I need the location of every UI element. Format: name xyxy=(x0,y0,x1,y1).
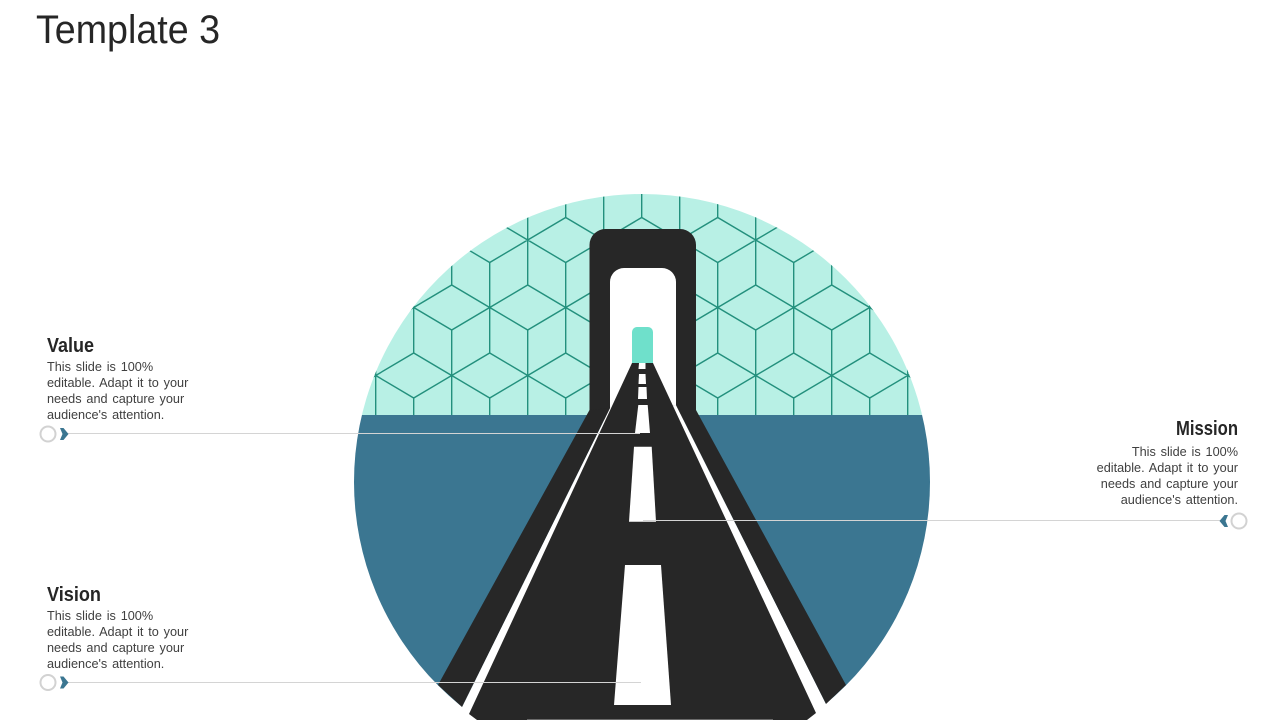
connector line: mission xyxy=(643,520,1222,522)
text block: mission: editable. Adapt it to your xyxy=(1097,461,1239,475)
connector line: value xyxy=(68,432,640,434)
marker circle: value xyxy=(40,426,56,442)
callout: value xyxy=(40,335,640,442)
heading: vision: Vision xyxy=(47,584,101,606)
van in tunnel xyxy=(632,327,653,363)
text block: vision: This slide is 100% xyxy=(47,609,153,623)
road white base xyxy=(462,405,826,720)
text block: vision: audience's attention. xyxy=(47,657,164,671)
text block: mission: This slide is 100% xyxy=(1132,445,1238,459)
chevron: value xyxy=(60,428,68,440)
tunnel xyxy=(590,229,696,420)
marker circle: vision xyxy=(40,675,56,690)
chevron: mission xyxy=(1220,515,1228,527)
text block: value: needs and capture your xyxy=(47,392,185,406)
text block: vision: needs and capture your xyxy=(47,641,185,655)
text block: vision: editable. Adapt it to your xyxy=(47,625,189,639)
text block: value: editable. Adapt it to your xyxy=(47,376,189,390)
callout: mission xyxy=(643,418,1246,528)
right road shoulder xyxy=(676,405,846,704)
text block: value: This slide is 100% xyxy=(47,360,153,374)
left road shoulder xyxy=(438,408,610,707)
connector line: vision xyxy=(68,682,641,684)
callout: vision xyxy=(40,584,641,690)
panel: blue ground xyxy=(340,415,944,720)
road base edge xyxy=(527,719,773,720)
heading: mission: Mission xyxy=(1176,418,1238,440)
text block: mission: audience's attention. xyxy=(1121,493,1238,507)
chevron: vision xyxy=(60,676,68,688)
marker circle: mission xyxy=(1232,514,1246,528)
panel: sky with cube pattern xyxy=(354,194,930,707)
text block: mission: needs and capture your xyxy=(1101,477,1239,491)
main road xyxy=(469,363,816,720)
road centre dashes xyxy=(614,363,671,705)
tunnel opening xyxy=(610,268,676,408)
text block: value: audience's attention. xyxy=(47,408,164,422)
illustration: road into tunnel in circle xyxy=(354,194,930,720)
heading: value: Value xyxy=(47,335,94,357)
title: Template 3 xyxy=(36,8,220,52)
